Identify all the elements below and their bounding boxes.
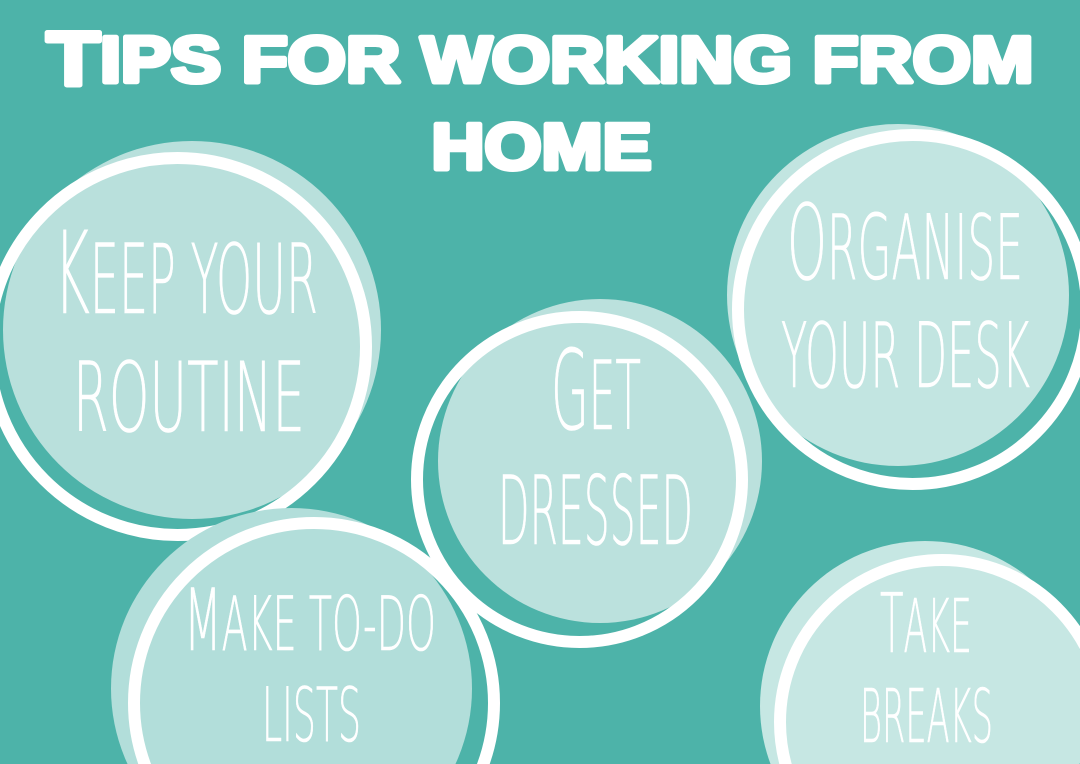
panel: make to-do lists: [111, 508, 494, 764]
title: [46, 17, 1034, 183]
title: T: [46, 17, 100, 102]
title: IPS FOR WORKING FROM: [100, 23, 1034, 96]
panel: get dressed: [417, 299, 762, 642]
panel: make to-do lists: MAKE TO-DO: [184, 571, 436, 671]
panel: get dressed: GET: [551, 327, 641, 456]
panel: make to-do lists: LISTS: [262, 671, 361, 759]
panel: take breaks: TAKE: [880, 577, 972, 672]
panel: organise your desk: [727, 124, 1080, 484]
panel: get dressed: DRESSED: [498, 457, 693, 567]
panel: take breaks: [760, 541, 1080, 764]
title: HOME: [432, 110, 652, 183]
panel: keep your routine: [0, 141, 381, 535]
panel: keep your routine: KEEP YOUR: [54, 207, 318, 340]
panel: keep your routine: ROUTINE: [73, 342, 305, 454]
